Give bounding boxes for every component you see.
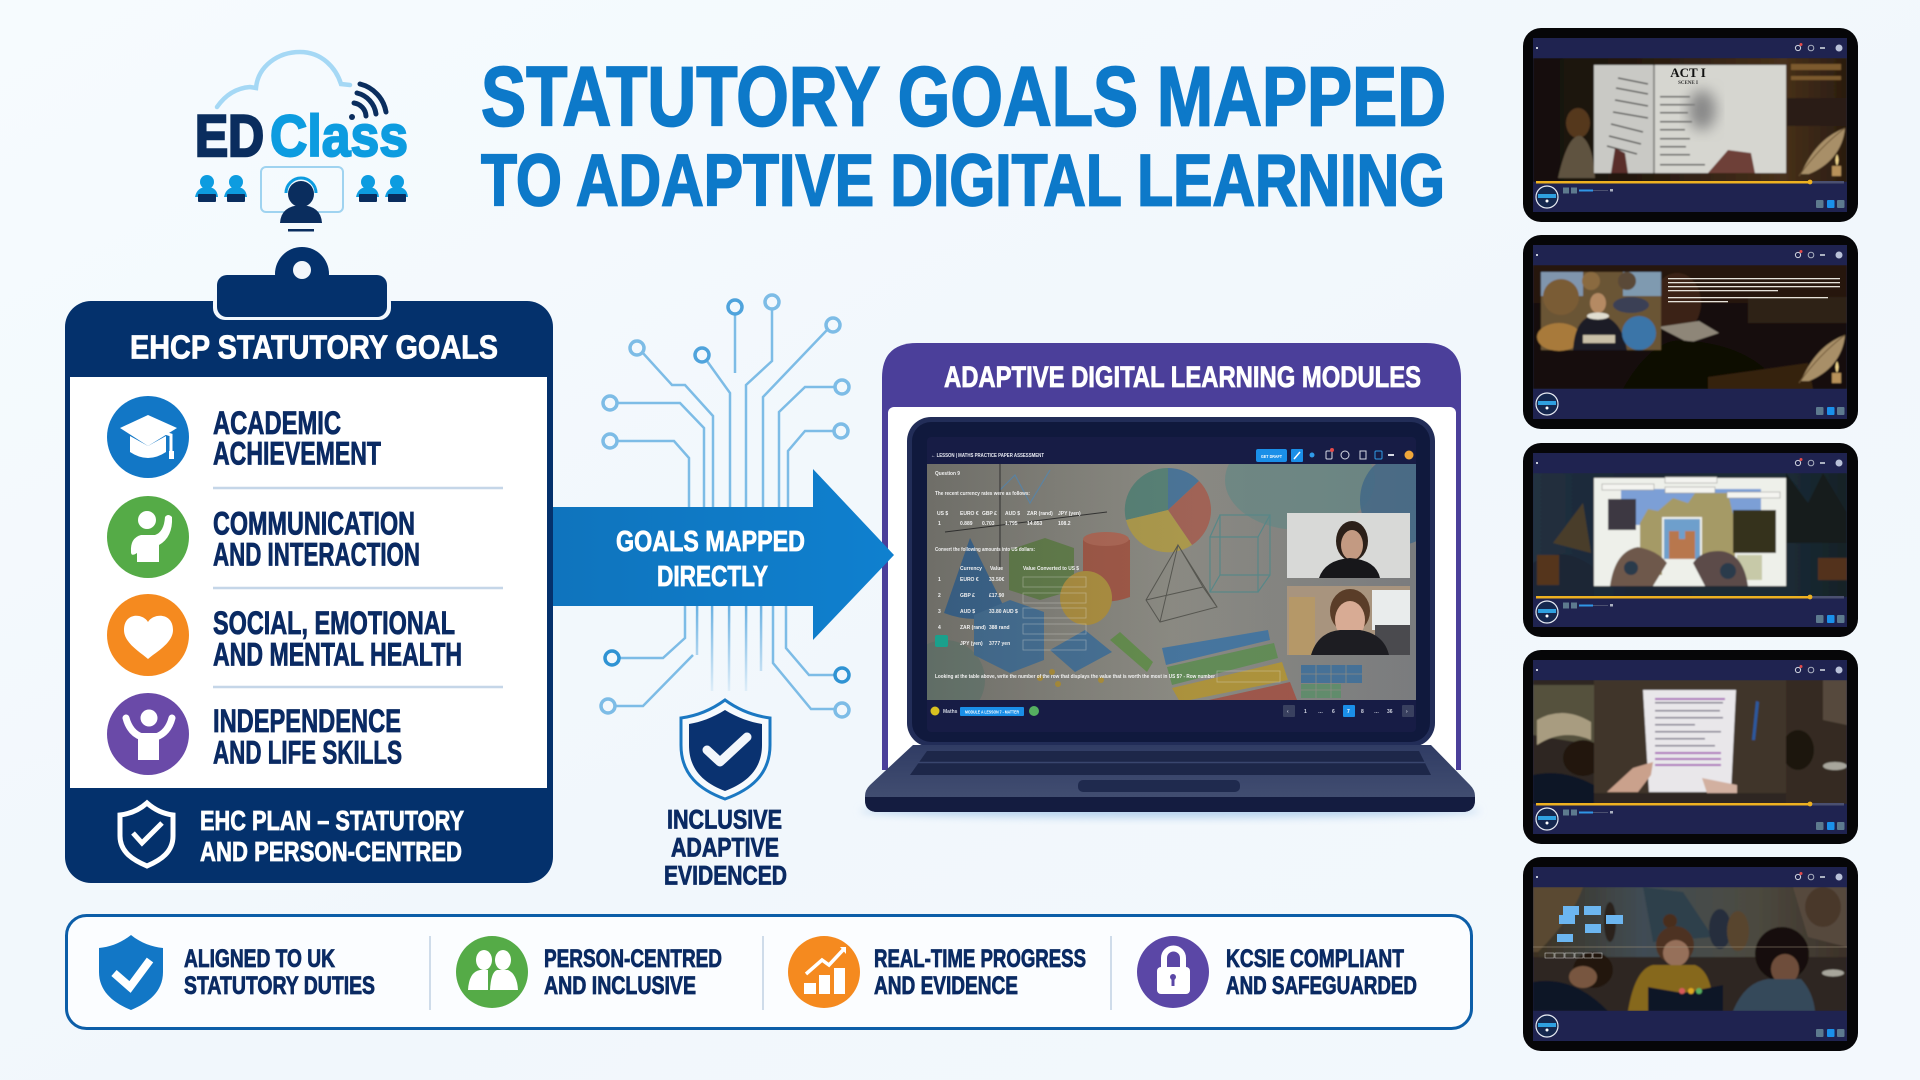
assessment question text: Looking at the table above, write the number of the row that displays the value that is worth the most in US $? - Row number [935,674,1215,680]
app footer: … [1374,709,1379,715]
footer: EHC plan [120,803,464,867]
laptop base [865,745,1475,812]
tablet 1: Act I script [1523,28,1858,222]
purple frame [882,343,1461,770]
assessment question text: JPY (yen) [960,641,983,647]
assessment question text: Question 9 [935,471,960,477]
icon: inclusive shield [681,700,770,799]
assessment question text: ZAR (rand) [1027,511,1053,517]
laptop screen [927,448,1416,717]
goal: communication and interaction [107,496,420,578]
app footer: MODULE A LESSON 7 - MATTER [965,710,1019,714]
text: inclusive adaptive evidenced: ADAPTIVE [671,832,779,862]
laptop lid [907,417,1435,747]
app footer: Maths [943,709,958,715]
footer: EHC plan: AND PERSON-CENTRED [200,836,462,867]
assessment question text: Value Converted to US $ [1023,566,1079,572]
app footer: 6 [1332,709,1335,715]
logo wordmark: ED [195,104,264,169]
logo wordmark: Class [270,104,408,169]
assessment question text: 0.703 [982,521,995,527]
assessment question text: 2 [938,593,941,599]
panel: EHCP statutory goals clipboard [65,247,553,883]
tablet 2: Shakespeare introduction [1523,235,1858,429]
assessment question text: EURO € [960,577,979,583]
app footer: 7 [1347,709,1350,715]
logo: EDClass [195,52,408,232]
assurance: KCSIE compliant and safeguarded: AND SAFEGUARDED [1226,972,1417,1000]
text: inclusive adaptive evidenced: EVIDENCED [664,860,787,890]
assessment question text: 388 rand [989,625,1010,631]
title: STATUTORY GOALS MAPPED [481,50,1446,144]
text: inclusive adaptive evidenced [664,804,787,890]
arrow: goals mapped directly: GOALS MAPPED [616,526,805,558]
assessment question text: 108.2 [1058,521,1071,527]
assessment question text: ZAR (rand) [960,625,986,631]
panel heading: EHCP STATUTORY GOALS [130,328,498,366]
assurance: aligned to UK statutory duties: STATUTORY DUTIES [184,972,375,1000]
assessment question text: 1 [938,521,941,527]
goal: communication and interaction: COMMUNICATION [213,506,415,542]
assessment question text: Convert the following amounts into US dollars: [935,547,1035,553]
app header: ← LESSON | MATHS PRACTICE PAPER ASSESSMENT [931,453,1045,459]
assurance: real-time progress and evidence: REAL-TIME PROGRESS [874,945,1086,973]
goal: social, emotional and mental health: SOCIAL, EMOTIONAL [213,605,455,641]
script heading: ACT I [1670,65,1706,80]
goals list panel [70,377,547,788]
goal: academic achievement: ACADEMIC [213,405,341,441]
logo students and teacher [195,167,408,232]
goal: communication and interaction: AND INTERACTION [213,536,420,572]
goal: social, emotional and mental health [107,594,462,676]
dimming overlay [927,464,1416,700]
video: student [1287,586,1410,655]
goal: academic achievement: ACHIEVEMENT [213,436,381,472]
assurance: KCSIE compliant and safeguarded [1137,936,1417,1008]
goal: independence and life skills: AND LIFE SKILLS [213,734,402,770]
app footer: 36 [1387,709,1393,715]
assessment question text [935,471,1215,680]
circuit lines connecting goals to learning [601,295,849,717]
app footer: ‹ [1287,709,1289,715]
logo wifi signal [349,84,386,120]
assessment question text: EURO € [960,511,979,517]
pie chart [1125,468,1211,552]
arrow: goals mapped directly: DIRECTLY [657,561,768,593]
app header: GET DRAFT [1261,454,1282,459]
video: teacher [1287,513,1410,578]
assessment question text: US $ [937,511,948,517]
goal: independence and life skills [107,693,402,775]
text: inclusive adaptive evidenced: INCLUSIVE [667,804,782,834]
panel: key assurances strip [66,916,1472,1028]
goal: academic achievement [107,396,381,478]
assurance: person-centred and inclusive: PERSON-CENTRED [544,945,722,973]
tablet 3: Notre-Dame collage [1523,443,1858,637]
assessment question text: JPY (yen) [1058,511,1081,517]
assessment question text: Value [990,566,1003,572]
maths illustration background [927,464,1416,700]
app footer: 1 [1304,709,1307,715]
assessment question text: 1 [938,577,941,583]
assessment question text: 3 [938,609,941,615]
tablet 1: Act I script: SCENE I [1678,81,1698,86]
assessment question text: £17.90 [989,593,1005,599]
assurance: real-time progress and evidence: AND EVIDENCE [874,972,1018,1000]
app footer: › [1406,709,1408,715]
assessment question text: 33.50€ [989,577,1005,583]
collage [1537,272,1661,351]
clipboard board [65,301,553,883]
footer: EHC plan: EHC PLAN – STATUTORY [200,805,464,836]
assurance: person-centred and inclusive [456,936,722,1008]
assessment question text: 3777 yen [989,641,1010,647]
assessment question text: GBP £ [960,593,975,599]
assessment question text: 14.853 [1027,521,1043,527]
arrow: goals mapped directly [553,469,894,640]
assessment question text: 33.80 AUD $ [989,609,1018,615]
logo cloud outline [217,52,350,107]
tablet 5: reading children activity [1523,857,1858,1051]
assurance: KCSIE compliant and safeguarded: KCSIE COMPLIANT [1226,945,1404,973]
logo wordmark [195,104,408,169]
title: TO ADAPTIVE DIGITAL LEARNING [481,140,1445,222]
assessment question text: AUD $ [1005,511,1020,517]
app footer: … [1318,709,1323,715]
assurance: real-time progress and evidence [788,936,1086,1008]
panel heading: ADAPTIVE DIGITAL LEARNING MODULES [944,361,1421,394]
assessment question text: Currency [960,566,982,572]
goal: social, emotional and mental health: AND MENTAL HEALTH [213,636,462,672]
assurance: aligned to UK statutory duties: ALIGNED TO UK [184,945,335,973]
goal: independence and life skills: INDEPENDENCE [213,703,401,739]
assessment question text: The recent currency rates were as follows: [935,491,1030,497]
laptop [860,417,1480,818]
assessment question text: 0.889 [960,521,973,527]
clipboard clip [213,247,391,320]
assurance: person-centred and inclusive: AND INCLUSIVE [544,972,696,1000]
assessment question text: 4 [938,625,941,631]
app footer: 8 [1361,709,1364,715]
assessment question text: GBP £ [982,511,997,517]
app header [931,448,1414,462]
title [481,50,1446,222]
assurance: aligned to UK statutory duties [99,935,375,1010]
tablet 4: annotated worksheet [1523,650,1858,844]
panel: adaptive digital learning modules [860,343,1480,818]
app footer [930,705,1414,717]
assessment question text: 1.795 [1005,521,1018,527]
assessment question text: AUD $ [960,609,975,615]
